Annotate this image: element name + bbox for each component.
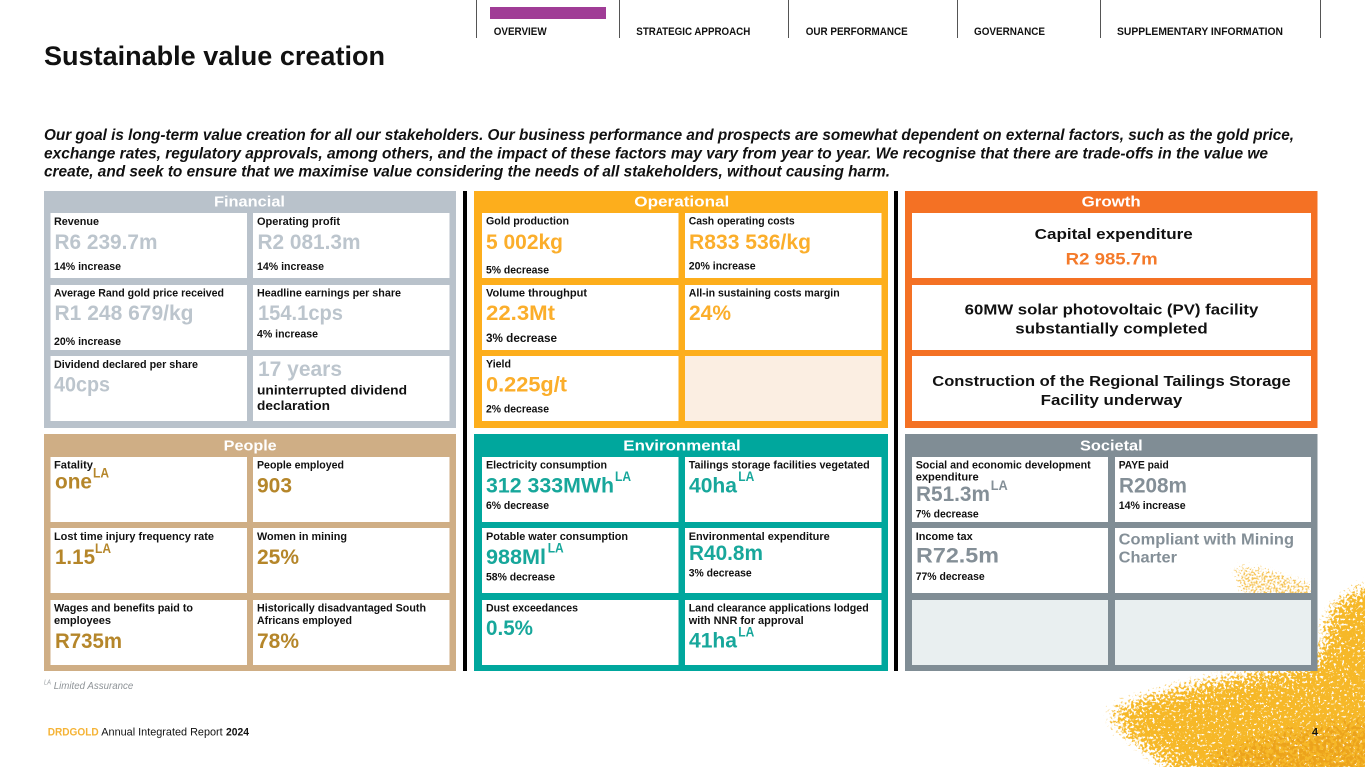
- panel: financial: [44, 191, 456, 428]
- metric: land clearance: 41ha: [689, 630, 737, 653]
- metric: capital expenditure: Capital expenditure: [1035, 226, 1193, 243]
- metric: wages and benefits: [50, 600, 247, 665]
- metric: all-in sustaining costs margin: All-in sustaining costs margin: [689, 287, 840, 299]
- metric: land clearance: [685, 600, 882, 665]
- heading: people: People: [224, 438, 277, 455]
- empty cell: [685, 356, 882, 421]
- panel: growth: [905, 191, 1318, 428]
- metric: environmental expenditure: [685, 528, 882, 593]
- metric: dust exceedances: 0.5%: [486, 617, 533, 640]
- metric: lost time injury frequency rate: LA: [95, 540, 111, 556]
- metric: dust exceedances: [482, 600, 678, 665]
- metric: social and economic development: expenditure: [916, 472, 979, 484]
- tab: governance: GOVERNANCE: [974, 26, 1045, 38]
- intro paragraph: [44, 127, 1294, 181]
- metric: 17 years: declaration: [257, 398, 330, 413]
- metric: historically disadvantaged: 78%: [257, 630, 299, 653]
- metric: dividend declared: 40cps: [54, 374, 110, 396]
- metric: 17 years: [253, 356, 450, 421]
- metric: operating profit: 14% increase: [257, 261, 324, 273]
- metric: paye paid: PAYE paid: [1119, 459, 1169, 471]
- column divider left: [463, 191, 467, 671]
- metric: electricity consumption: [482, 457, 678, 522]
- metric: potable water: 58% decrease: [486, 572, 555, 584]
- gold dust background: [1090, 580, 1365, 767]
- metric: lost time injury frequency rate: 1.15: [55, 546, 95, 569]
- metric: gold production: 5% decrease: [486, 264, 549, 276]
- metric: revenue: [50, 213, 247, 278]
- tab: strategic approach: STRATEGIC APPROACH: [636, 26, 750, 38]
- metric: historically disadvantaged: Historically disadvantaged South: [257, 603, 426, 615]
- metric: cash operating costs: [685, 213, 882, 278]
- metric: capital expenditure: R2 985.7m: [1066, 250, 1158, 268]
- metric: social and economic development: Social and economic development: [916, 459, 1091, 471]
- metric: volume throughput: [482, 285, 678, 350]
- metric: land clearance: LA: [738, 624, 754, 640]
- metric: fatality: Fatality: [54, 459, 94, 471]
- metric: yield: 2% decrease: [486, 403, 549, 415]
- metric: land clearance: with NNR for approval: [688, 615, 804, 627]
- metric: revenue: Revenue: [54, 216, 99, 228]
- metric: land clearance: Land clearance applications lodged: [689, 603, 869, 615]
- tab: our performance: OUR PERFORMANCE: [806, 26, 908, 38]
- metric: paye paid: 14% increase: [1119, 500, 1186, 512]
- intro paragraph: exchange rates, regulatory approvals, among others, and the impact of these factors may vary from year to year. We recognise that there are trade-offs in the value we: [44, 145, 1268, 162]
- footer: report name: [48, 727, 250, 739]
- metric: dividend declared: Dividend declared per share: [54, 359, 198, 371]
- panel: environmental: [474, 434, 888, 671]
- metric: operating profit: [253, 213, 450, 278]
- statement: compliant with mining charter: Compliant with Mining: [1119, 531, 1294, 548]
- metric: revenue: 14% increase: [54, 261, 121, 273]
- statement: tailings storage: Facility underway: [1041, 392, 1183, 409]
- metric: potable water: LA: [548, 540, 564, 556]
- metric: 17 years: uninterrupted dividend: [257, 382, 407, 398]
- metric: people employed: People employed: [257, 459, 344, 471]
- metric: potable water: 988Ml: [486, 546, 546, 569]
- navigation bar: [476, 0, 1320, 38]
- statement: compliant with mining charter: [1115, 528, 1311, 593]
- metric: tailings vegetated: [685, 457, 882, 522]
- statement: tailings storage: [912, 356, 1311, 421]
- metric: women in mining: Women in mining: [257, 531, 347, 543]
- title: Sustainable value creation: [44, 41, 385, 71]
- metric: social and economic development: [912, 457, 1108, 522]
- metric: all-in sustaining costs margin: 24%: [689, 302, 731, 325]
- empty cell right: [1115, 600, 1311, 665]
- heading: societal: Societal: [1080, 438, 1143, 455]
- metric: cash operating costs: 20% increase: [689, 260, 756, 272]
- metric: historically disadvantaged: Africans employed: [257, 615, 352, 627]
- metric: headline earnings per share: Headline earnings per share: [257, 288, 401, 300]
- intro paragraph: create, and seek to ensure that we maximise value considering the needs of all stakeholders, without causing harm.: [44, 164, 890, 181]
- heading: growth: Growth: [1082, 194, 1141, 211]
- metric: headline earnings per share: 4% increase: [257, 329, 318, 341]
- metric: headline earnings per share: 154.1cps: [258, 302, 343, 325]
- metric: women in mining: 25%: [257, 546, 299, 569]
- metric: yield: [482, 356, 678, 421]
- metric: income tax: 77% decrease: [916, 571, 985, 583]
- metric: tailings vegetated: LA: [738, 468, 754, 484]
- heading: operational: Operational: [634, 194, 729, 211]
- metric: average rand gold price: R1 248 679/kg: [54, 302, 194, 325]
- statement: solar facility: [912, 285, 1311, 350]
- metric: potable water: [482, 528, 678, 593]
- tab: overview: OVERVIEW: [494, 26, 547, 38]
- metric: capital expenditure: [912, 213, 1311, 278]
- metric: all-in sustaining costs margin: [685, 285, 882, 350]
- metric: fatality: [50, 457, 247, 522]
- metric: lost time injury frequency rate: [50, 528, 247, 593]
- metric: 17 years: 17 years: [258, 358, 342, 381]
- metric: environmental expenditure: Environmental expenditure: [689, 531, 830, 543]
- column divider right: [894, 191, 898, 671]
- heading: financial: Financial: [214, 194, 285, 211]
- metric: lost time injury frequency rate: Lost time injury frequency rate: [54, 531, 214, 543]
- page number: 4: [1312, 726, 1319, 738]
- metric: social and economic development: R51.3m: [916, 483, 990, 506]
- metric: yield: 0.225g/t: [486, 374, 567, 397]
- metric: cash operating costs: R833 536/kg: [689, 231, 811, 254]
- metric: people employed: [253, 457, 450, 522]
- metric: women in mining: [253, 528, 450, 593]
- metric: electricity consumption: Electricity consumption: [486, 459, 607, 471]
- metric: historically disadvantaged: [253, 600, 450, 665]
- metric: gold production: 5 002kg: [486, 231, 563, 254]
- metric: paye paid: R208m: [1119, 474, 1187, 497]
- active tab marker: [490, 7, 606, 19]
- metric: volume throughput: 3% decrease: [486, 331, 557, 345]
- footer: report name: DRDGOLD: [48, 727, 99, 739]
- metric: wages and benefits: Wages and benefits paid to: [54, 603, 193, 615]
- metric: dividend declared: [50, 356, 247, 421]
- metric: electricity consumption: 6% decrease: [486, 500, 549, 512]
- metric: tailings vegetated: 40ha: [689, 474, 737, 497]
- metric: revenue: R6 239.7m: [54, 231, 158, 254]
- metric: income tax: Income tax: [916, 531, 973, 543]
- metric: potable water: Potable water consumption: [486, 531, 628, 543]
- metric: operating profit: Operating profit: [257, 216, 340, 228]
- metric: cash operating costs: Cash operating costs: [689, 216, 795, 228]
- metric: wages and benefits: employees: [54, 615, 111, 627]
- footer: report name: Annual Integrated Report: [101, 727, 223, 739]
- metric: tailings vegetated: Tailings storage facilities vegetated: [689, 459, 870, 471]
- metric: fatality: LA: [93, 465, 109, 481]
- intro paragraph: Our goal is long-term value creation for all our stakeholders. Our business performance and prospects are somewhat dependent on external factors, such as the gold price,: [44, 127, 1294, 144]
- metric: average rand gold price: 20% increase: [54, 336, 121, 348]
- panel: people: [44, 434, 456, 671]
- heading: environmental: Environmental: [623, 438, 741, 455]
- footer: report name: 2024: [226, 727, 250, 739]
- metric: fatality: one: [55, 470, 92, 493]
- statement: tailings storage: Construction of the Regional Tailings Storage: [932, 373, 1291, 390]
- metric: wages and benefits: R735m: [55, 630, 122, 653]
- metric: electricity consumption: LA: [615, 468, 631, 484]
- metric: headline earnings per share: [253, 285, 450, 350]
- metric: volume throughput: 22.3Mt: [486, 302, 555, 325]
- metric: average rand gold price: Average Rand gold price received: [54, 288, 224, 300]
- metric: people employed: 903: [257, 475, 292, 498]
- statement: compliant with mining charter: Charter: [1119, 549, 1177, 566]
- metric: gold production: [482, 213, 678, 278]
- metric: social and economic development: 7% decrease: [916, 508, 979, 520]
- metric: dust exceedances: Dust exceedances: [486, 603, 578, 615]
- metric: gold production: Gold production: [486, 216, 569, 228]
- statement: solar facility: substantially completed: [1015, 320, 1208, 337]
- metric: income tax: [912, 528, 1108, 593]
- metric: yield: Yield: [486, 358, 511, 370]
- metric: income tax: R72.5m: [916, 544, 999, 567]
- metric: paye paid: [1115, 457, 1311, 522]
- metric: social and economic development: LA: [991, 477, 1008, 493]
- metric: volume throughput: Volume throughput: [486, 287, 587, 299]
- metric: environmental expenditure: R40.8m: [689, 542, 763, 565]
- panel: societal: [905, 434, 1320, 671]
- statement: solar facility: 60MW solar photovoltaic (PV) facility: [965, 301, 1259, 318]
- tab: supplementary information: SUPPLEMENTARY INFORMATION: [1117, 26, 1283, 38]
- empty cell left: [912, 600, 1108, 665]
- metric: environmental expenditure: 3% decrease: [689, 568, 752, 580]
- metric: average rand gold price: [50, 285, 247, 350]
- footnote: limited assurance: Limited Assurance: [54, 681, 134, 692]
- metric: electricity consumption: 312 333MWh: [486, 474, 614, 497]
- footnote: limited assurance: LA: [44, 680, 51, 686]
- panel: operational: [474, 191, 888, 428]
- metric: operating profit: R2 081.3m: [258, 231, 360, 254]
